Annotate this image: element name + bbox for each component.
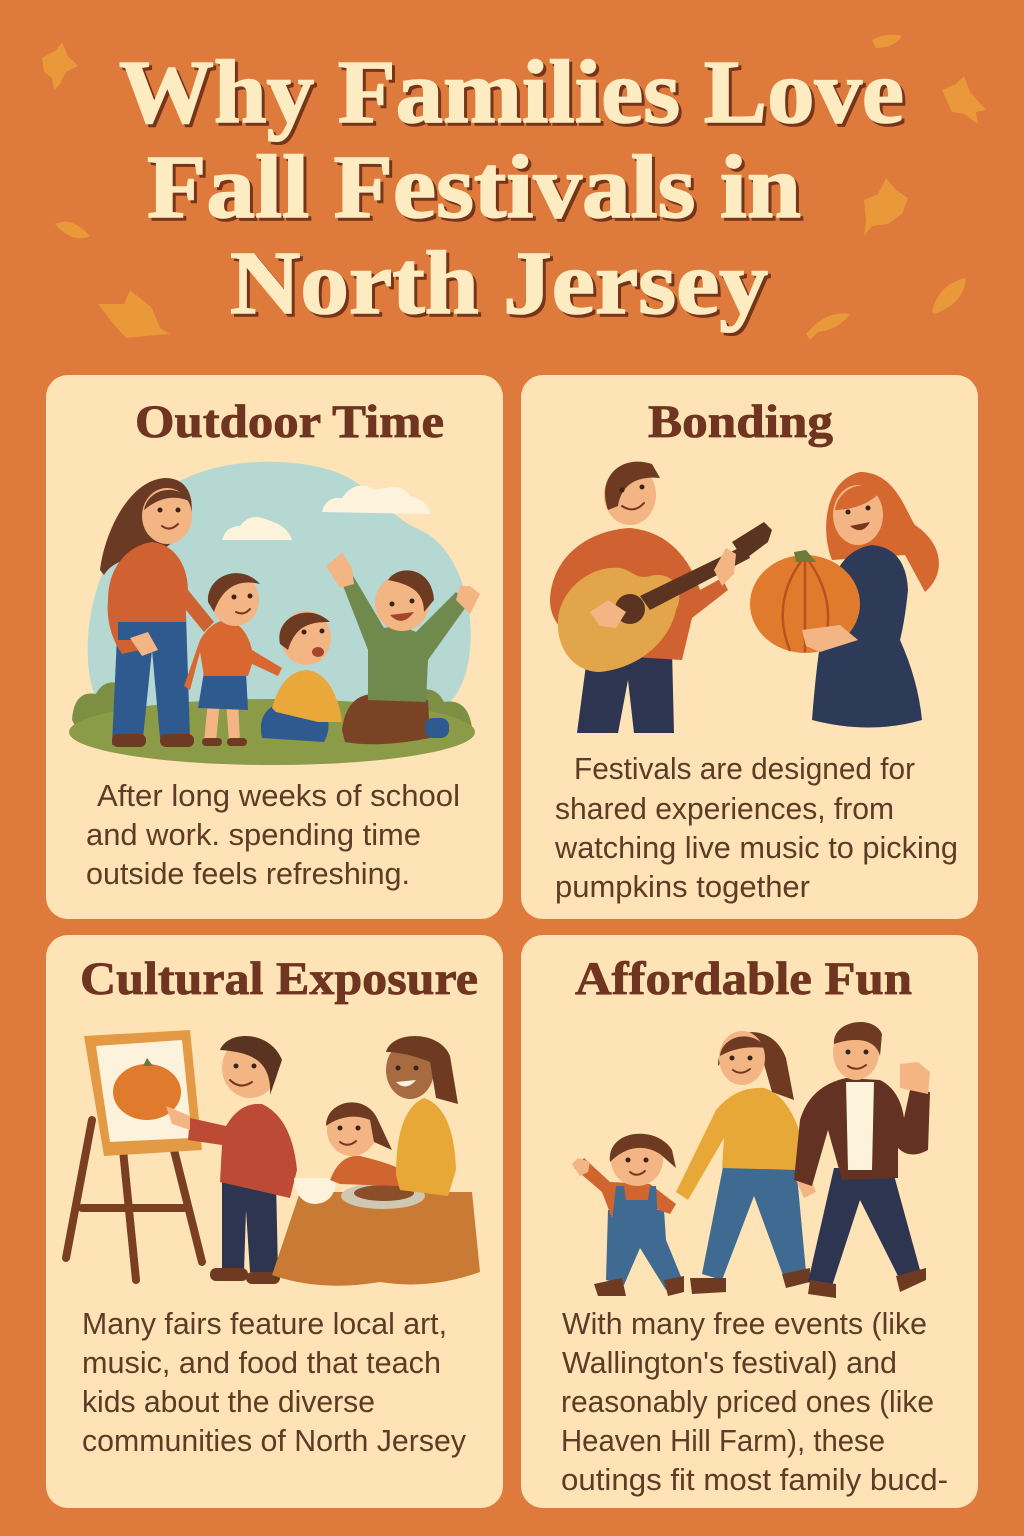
woman with pumpkin [750,472,939,728]
body text: affordable fun: Heaven Hill Farm), these [561,1423,885,1458]
mother [676,1031,816,1294]
easel [66,1030,202,1280]
decorative falling leaves [42,35,986,340]
body text: affordable fun [561,1306,948,1497]
body text: cultural exposure: Many fairs feature local art, [82,1306,447,1341]
father [794,1022,930,1298]
body text: affordable fun: reasonably priced ones (like [561,1384,934,1419]
body text: cultural exposure: communities of North Jersey [82,1423,466,1458]
seated girl [326,1102,420,1186]
title: Why Families Love [122,46,907,145]
body text: cultural exposure: music, and food that teach [82,1345,441,1380]
body text: affordable fun: outings fit most family bucd- [561,1462,948,1497]
body text: bonding: pumpkins together [555,869,810,904]
body text: bonding: Festivals are designed for [574,751,915,786]
mother [100,478,214,747]
body text: affordable fun: With many free events (like [562,1306,927,1341]
panel: outdoor time [46,375,503,919]
girl [184,573,282,746]
body text: affordable fun: Wallington's festival) and [562,1345,897,1380]
panel: affordable fun [521,935,978,1508]
body text: bonding: shared experiences, from [555,791,894,826]
body text: outdoor time: and work. spending time [86,817,421,852]
body text: bonding: watching live music to picking [554,830,958,865]
panel: bonding [521,375,978,919]
title [119,43,907,336]
title: Fall Festivals in [147,138,801,237]
illustration: child at easel and family at food table [66,1030,480,1286]
body text: outdoor time: outside feels refreshing. [86,856,410,891]
table with food [272,1178,480,1286]
waving boy [326,552,480,744]
title: Fall Festivals in [150,141,804,240]
title: North Jersey [233,237,771,336]
title: North Jersey [230,234,768,333]
title: Why Families Love [119,43,904,142]
body text: outdoor time [86,778,460,891]
heading: affordable fun: Affordable Fun [575,953,912,1005]
illustration: family walking [572,1022,930,1298]
man with guitar [550,462,772,733]
heading: outdoor time: Outdoor Time [135,396,444,448]
mother at table [386,1036,458,1196]
body text: cultural exposure: kids about the diverse [82,1384,375,1419]
body text: outdoor time: After long weeks of school [97,778,460,813]
panel: cultural exposure [46,935,503,1508]
body text: bonding [554,751,958,904]
illustration: man with guitar and woman with pumpkin [550,462,939,733]
heading: cultural exposure: Cultural Exposure [80,953,478,1005]
illustration: family outdoors [69,462,480,765]
painter boy [166,1036,297,1284]
small girl [572,1134,684,1296]
heading: bonding: Bonding [648,396,834,448]
seated boy [261,611,342,742]
body text: cultural exposure [82,1306,466,1458]
